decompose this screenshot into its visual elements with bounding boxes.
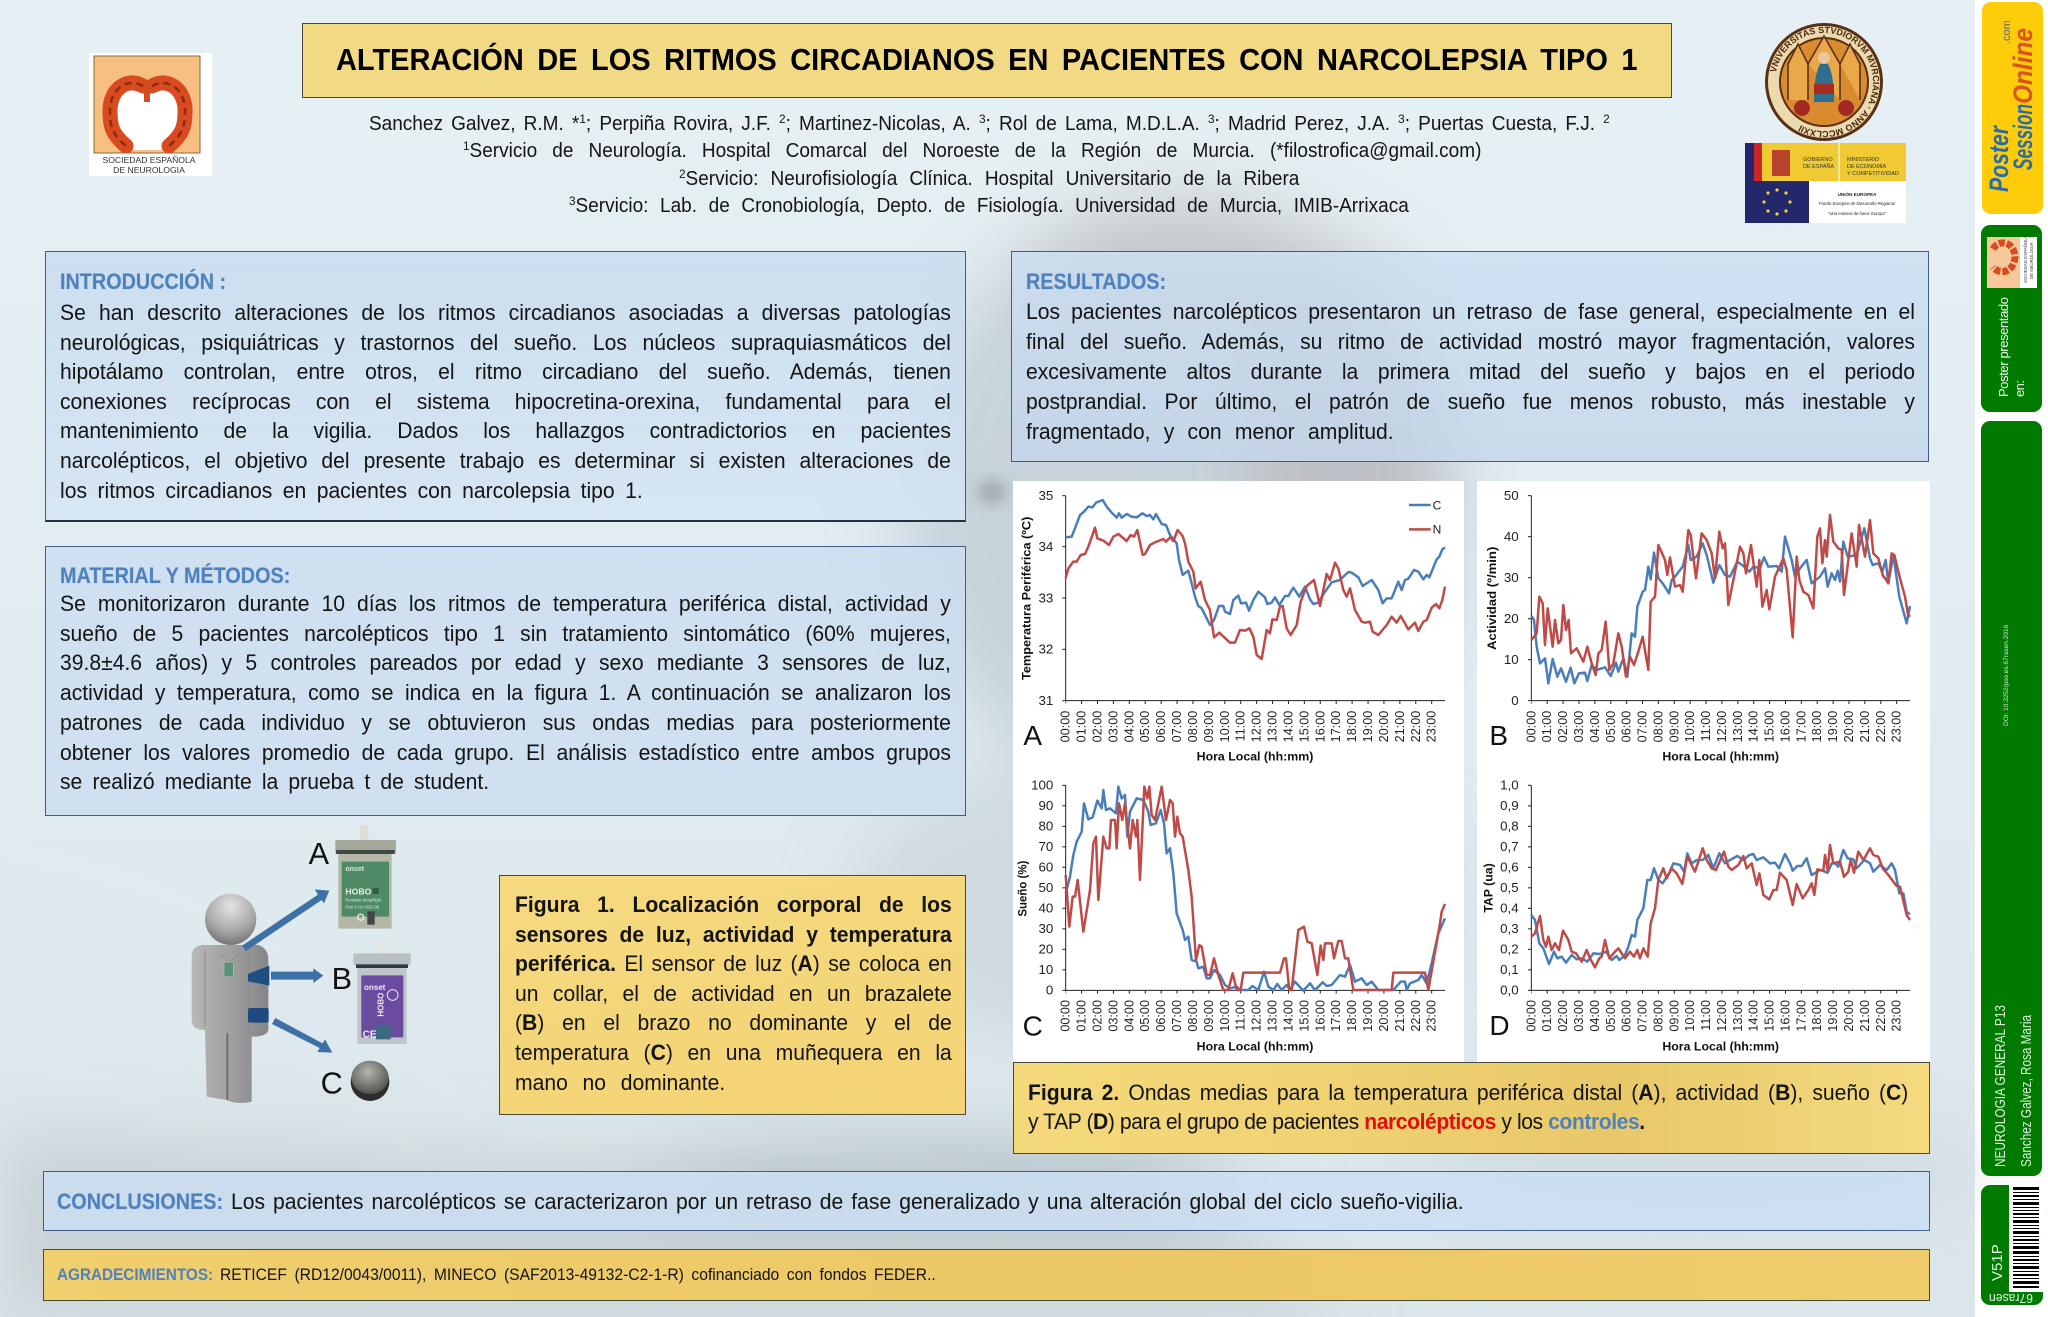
chart A: temperatura periférica: 15:00 bbox=[1297, 711, 1311, 742]
chart D: TAP: TAP (ua) bbox=[1482, 863, 1496, 913]
heading: conclusiones: CONCLUSIONES: bbox=[57, 1189, 223, 1214]
chart D: TAP: 09:00 bbox=[1667, 1000, 1681, 1032]
chart B: actividad: B bbox=[1489, 720, 1508, 751]
text: material y métodos: patrones de cada individuo y se obtuvieron sus ondas medias para posteriormente bbox=[60, 710, 951, 735]
panel: introducción bbox=[45, 251, 966, 522]
chart D: TAP: 22:00 bbox=[1874, 1000, 1888, 1032]
chart B: actividad: 23:00 bbox=[1890, 711, 1904, 742]
chart C: sueño: C bbox=[1023, 1011, 1043, 1042]
chart C: sueño: Sueño (%) bbox=[1016, 861, 1030, 917]
panel: material y métodos bbox=[45, 546, 966, 816]
chart A: temperatura periférica bbox=[1020, 488, 1446, 764]
text: resultados: Los pacientes narcolépticos presentaron un retraso de fase general, especialmente en el bbox=[1026, 299, 1915, 324]
caption: figura 1 bbox=[499, 875, 966, 1115]
chart D: TAP: D bbox=[1489, 1010, 1510, 1041]
chart A: temperatura periférica: 31 bbox=[1039, 693, 1053, 708]
chart A: temperatura periférica: Hora Local (hh:mm) bbox=[1197, 750, 1313, 764]
chart C: sueño bbox=[1016, 778, 1446, 1054]
icon: sensor B bbox=[353, 942, 411, 1044]
text: introducción: los ritmos circadianos en pacientes con narcolepsia tipo 1. bbox=[60, 478, 643, 503]
chart B: actividad: 40 bbox=[1504, 529, 1519, 544]
chart B: actividad: 09:00 bbox=[1667, 711, 1681, 742]
chart C: sueño: 05:00 bbox=[1138, 1000, 1152, 1032]
chart C: sueño: 15:00 bbox=[1297, 1000, 1311, 1032]
chart D: TAP: 0,6 bbox=[1500, 860, 1519, 875]
authors and affiliations: Sanchez Galvez, R.M. *1; Perpiña Rovira, J.F. 2; Martinez-Nicolas, A. 3; Rol de Lama, M.D.L.A. 3; Madrid Perez, J.A. 3; Puertas Cuesta, F.J. 2 bbox=[369, 112, 1610, 135]
chart A: temperatura periférica: A bbox=[1023, 720, 1042, 751]
chart B: actividad: 14:00 bbox=[1747, 711, 1761, 742]
icon: person bbox=[192, 894, 269, 1103]
chart C: sueño: 07:00 bbox=[1170, 1000, 1184, 1032]
chart A: temperatura periférica: 32 bbox=[1039, 642, 1053, 657]
chart A: temperatura periférica: 20:00 bbox=[1377, 711, 1391, 742]
chart A: temperatura periférica: 11:00 bbox=[1234, 711, 1248, 741]
chart A: temperatura periférica: 13:00 bbox=[1266, 711, 1280, 742]
text: conclusiones: Los pacientes narcolépticos se caracterizaron por un retraso de fase generalizado y una alteración global del ciclo sueño-vigilia. bbox=[231, 1189, 1464, 1214]
sidebar: barcode tag: V51P bbox=[1989, 1244, 2006, 1281]
text: material y métodos: Se monitorizaron durante 10 días los ritmos de temperatura periférica distal, actividad y bbox=[60, 591, 951, 616]
chart C: sueño: 40 bbox=[1039, 901, 1053, 916]
chart D: TAP: 01:00 bbox=[1540, 1000, 1554, 1032]
chart C: sueño: 01:00 bbox=[1075, 1000, 1089, 1032]
chart D: TAP: 0,1 bbox=[1500, 962, 1519, 977]
sidebar: session info: DOI: 10.3252/pso.es.67rasen.2016 bbox=[2003, 624, 2010, 726]
chart B: actividad: 10:00 bbox=[1683, 711, 1697, 742]
chart C: sueño: 16:00 bbox=[1313, 1000, 1327, 1032]
text: material y métodos: actividad y temperatura, como se indica en la figura 1. A continuación se analizaron los bbox=[60, 680, 951, 705]
chart C: sueño: 22:00 bbox=[1409, 1000, 1423, 1032]
figure 1: person with sensors bbox=[192, 825, 411, 1103]
chart B: actividad: 18:00 bbox=[1810, 711, 1824, 742]
sidebar: barcode tag bbox=[1981, 1185, 2043, 1305]
chart D: TAP: 20:00 bbox=[1842, 1000, 1856, 1032]
text: resultados bbox=[1026, 299, 1915, 444]
sidebar: poster presentado en: Poster presentado bbox=[1996, 297, 2011, 397]
caption: figura 1: periférica. El sensor de luz (A) se coloca en bbox=[515, 951, 952, 976]
chart C: sueño: 80 bbox=[1039, 819, 1053, 834]
chart C: sueño: 23:00 bbox=[1425, 1000, 1439, 1032]
chart B: actividad: 20:00 bbox=[1842, 711, 1856, 742]
heading: resultados: RESULTADOS: bbox=[1026, 269, 1166, 294]
logo: Ministerio de Economía y FEDER bbox=[1745, 143, 1906, 223]
chart D: TAP: 10:00 bbox=[1683, 1000, 1697, 1032]
arrow: to sensor A bbox=[242, 889, 329, 951]
chart A: temperatura periférica: 17:00 bbox=[1329, 711, 1343, 742]
chart D: TAP: 19:00 bbox=[1826, 1000, 1840, 1032]
chart C: sueño: 21:00 bbox=[1393, 1000, 1407, 1032]
chart C: sueño: 50 bbox=[1039, 880, 1053, 895]
chart D: TAP: 14:00 bbox=[1747, 1000, 1761, 1032]
chart C: sueño: 08:00 bbox=[1186, 1000, 1200, 1032]
icon: sensor B: HOBO bbox=[376, 993, 385, 1017]
logo: Universidad de Murcia seal: VNIVERSITAS STVDIORVM MVRCIANA · ANNO MCCLXXII bbox=[1770, 26, 1880, 138]
text: material y métodos: se realizó mediante la prueba t de student. bbox=[60, 769, 489, 794]
panel: conclusiones bbox=[43, 1171, 1930, 1231]
sidebar: PosterSessionOnline badge: Poster bbox=[1984, 125, 2014, 192]
chart D: TAP: 02:00 bbox=[1556, 1000, 1570, 1032]
sidebar: poster presentado en: en: bbox=[2012, 380, 2027, 397]
chart D: TAP: 03:00 bbox=[1572, 1000, 1586, 1032]
title: ALTERACIÓN DE LOS RITMOS CIRCADIANOS EN PACIENTES CON NARCOLEPSIA TIPO 1 bbox=[336, 43, 1638, 77]
chart A: temperatura periférica: 23:00 bbox=[1425, 711, 1439, 742]
chart B: actividad: 05:00 bbox=[1604, 711, 1618, 742]
chart C: sueño: Hora Local (hh:mm) bbox=[1197, 1040, 1313, 1054]
chart A: temperatura periférica: C bbox=[1433, 498, 1442, 512]
chart C: sueño: 60 bbox=[1039, 860, 1053, 875]
chart B: actividad: 21:00 bbox=[1858, 711, 1872, 742]
chart C: sueño: 12:00 bbox=[1250, 1000, 1264, 1032]
chart D: TAP: 08:00 bbox=[1651, 1000, 1665, 1032]
chart C: sueño: 09:00 bbox=[1202, 1000, 1216, 1032]
icon: sensor A: Pendant temp/light bbox=[345, 897, 382, 902]
authors and affiliations: 2Servicio: Neurofisiología Clínica. Hospital Universitario de la Ribera bbox=[679, 167, 1299, 190]
authors and affiliations: 3Servicio: Lab. de Cronobiología, Depto. de Fisiología. Universidad de Murcia, IMIB-Arrixaca bbox=[569, 194, 1409, 217]
authors and affiliations bbox=[369, 112, 1610, 217]
chart D: TAP: 23:00 bbox=[1890, 1000, 1904, 1032]
chart D: TAP: 04:00 bbox=[1588, 1000, 1602, 1032]
label: C: C bbox=[321, 1066, 343, 1100]
text: resultados: final del sueño. Además, su ritmo de actividad mostró mayor fragmentación, valores bbox=[1026, 329, 1915, 354]
chart A: temperatura periférica: 06:00 bbox=[1154, 711, 1168, 742]
chart B: actividad: Hora Local (hh:mm) bbox=[1662, 750, 1779, 764]
chart D: TAP: 06:00 bbox=[1620, 1000, 1634, 1032]
heading: introducción: INTRODUCCIÓN : bbox=[60, 269, 226, 294]
chart C: sueño: 11:00 bbox=[1234, 1000, 1248, 1031]
text: introducción: hipotálamo controlan, entre otros, el ritmo circadiano del sueño. Además, tienen bbox=[60, 359, 951, 384]
caption: figura 2 bbox=[1013, 1062, 1930, 1154]
chart D: TAP: 21:00 bbox=[1858, 1000, 1872, 1032]
chart B: actividad: 01:00 bbox=[1540, 711, 1554, 742]
chart D: TAP: 11:00 bbox=[1699, 1000, 1713, 1031]
chart D: TAP: 0,9 bbox=[1500, 798, 1519, 813]
chart D: TAP: 0,5 bbox=[1500, 880, 1519, 895]
chart A: temperatura periférica: 34 bbox=[1039, 539, 1054, 554]
chart A: temperatura periférica: 19:00 bbox=[1361, 711, 1375, 742]
chart A: temperatura periférica: 01:00 bbox=[1075, 711, 1089, 742]
chart C: sueño: 18:00 bbox=[1345, 1000, 1359, 1032]
text: introducción: Se han descrito alteraciones de los ritmos circadianos asociadas a diversas patologías bbox=[60, 300, 951, 325]
chart D: TAP: 05:00 bbox=[1604, 1000, 1618, 1032]
chart C: sueño: 0 bbox=[1046, 983, 1053, 998]
chart C: sueño: 20 bbox=[1039, 942, 1053, 957]
chart B: actividad: 13:00 bbox=[1731, 711, 1745, 742]
icon: sensor A: onset bbox=[345, 866, 365, 873]
chart A: temperatura periférica: 12:00 bbox=[1250, 711, 1264, 742]
chart B: actividad: 17:00 bbox=[1794, 711, 1808, 742]
logo: Ministerio de Economía y FEDER: Fondo Europeo de Desarrollo Regional bbox=[1819, 201, 1896, 206]
sidebar: PosterSessionOnline badge bbox=[1982, 2, 2043, 214]
caption: figura 1: mano no dominante. bbox=[515, 1070, 725, 1095]
chart A: temperatura periférica: 04:00 bbox=[1122, 711, 1136, 742]
text: material y métodos bbox=[60, 591, 951, 794]
chart C: sueño: 14:00 bbox=[1281, 1000, 1295, 1032]
chart A: temperatura periférica: 33 bbox=[1039, 590, 1053, 605]
caption: figura 1: sensores de luz, actividad y temperatura bbox=[515, 922, 952, 947]
logo: Sociedad Española de Neurología: SOCIEDAD ESPAÑOLA bbox=[103, 155, 196, 165]
chart C: sueño: 10 bbox=[1039, 962, 1053, 977]
sidebar: PosterSessionOnline badge: Online bbox=[2008, 28, 2038, 104]
chart D: TAP: 16:00 bbox=[1778, 1000, 1792, 1032]
arrow: to sensor C bbox=[272, 1018, 332, 1053]
text: resultados: excesivamente altos durante la primera mitad del sueño y bajos en el periodo bbox=[1026, 359, 1915, 384]
chart D: TAP: 18:00 bbox=[1810, 1000, 1824, 1032]
chart B: actividad: 04:00 bbox=[1588, 711, 1602, 742]
chart C: sueño: 02:00 bbox=[1090, 1000, 1104, 1032]
sidebar: session info bbox=[1981, 421, 2042, 1176]
chart A: temperatura periférica: 18:00 bbox=[1345, 711, 1359, 742]
icon: sensor A: Part # UA-002-08 bbox=[345, 904, 380, 909]
text: material y métodos: 39.8±4.6 años) y 5 controles pareados por edad y sexo mediante 3 sensores de luz, bbox=[60, 650, 951, 675]
chart B: actividad: 30 bbox=[1504, 570, 1519, 585]
chart A: temperatura periférica: Temperatura Periférica (ºC) bbox=[1020, 517, 1034, 680]
caption: figura 1: un collar, el de actividad en un brazalete bbox=[515, 981, 952, 1006]
chart D: TAP bbox=[1482, 778, 1911, 1054]
chart A: temperatura periférica: 05:00 bbox=[1138, 711, 1152, 742]
chart B: actividad bbox=[1485, 488, 1912, 764]
chart D: TAP: Hora Local (hh:mm) bbox=[1662, 1040, 1779, 1054]
text: introducción: narcolépticos, el objetivo del presente trabajo es determinar si existen alteraciones de bbox=[60, 448, 951, 473]
text: agradecimientos: RETICEF (RD12/0043/0011), MINECO (SAF2013-49132-C2-1-R) cofinanciado con fondos FEDER.. bbox=[220, 1265, 936, 1284]
chart B: actividad: 20 bbox=[1504, 611, 1519, 626]
chart C: sueño: 00:00 bbox=[1059, 1000, 1073, 1032]
sidebar: session info: Sanchez Galvez, Rosa Maria bbox=[2019, 1014, 2035, 1167]
caption: figura 1: Figura 1. Localización corporal de los bbox=[515, 892, 952, 917]
sidebar: PosterSessionOnline badge: Session bbox=[2008, 104, 2038, 170]
text: introducción: mantenimiento de la vigilia. Dados los hallazgos contradictorios en pacientes bbox=[60, 418, 951, 443]
chart B: actividad: 19:00 bbox=[1826, 711, 1840, 742]
chart D: TAP: 15:00 bbox=[1763, 1000, 1777, 1032]
logo: Ministerio de Economía y FEDER: GOBIERNO bbox=[1803, 157, 1833, 163]
icon: sensor C button bbox=[351, 1061, 389, 1101]
panel: agradecimientos bbox=[43, 1249, 1930, 1301]
panel: chart backdrop left bbox=[1013, 481, 1464, 1063]
caption: figura 2: Figura 2. Ondas medias para la temperatura periférica distal (A), actividad (B), sueño (C) bbox=[1028, 1080, 1908, 1105]
chart C: sueño: 17:00 bbox=[1329, 1000, 1343, 1032]
chart D: TAP: 00:00 bbox=[1524, 1000, 1538, 1032]
chart A: temperatura periférica: 14:00 bbox=[1281, 711, 1295, 742]
chart C: sueño: 19:00 bbox=[1361, 1000, 1375, 1032]
sidebar: poster presentado en bbox=[1981, 225, 2042, 412]
chart C: sueño: 70 bbox=[1039, 839, 1053, 854]
logo: Ministerio de Economía y FEDER: MINISTERIO bbox=[1847, 157, 1880, 163]
chart D: TAP: 0,8 bbox=[1500, 819, 1519, 834]
heading: agradecimientos: AGRADECIMIENTOS: bbox=[57, 1265, 213, 1284]
authors and affiliations: 1Servicio de Neurología. Hospital Comarcal del Noroeste de la Región de Murcia. (*filostrofica@gmail.com) bbox=[463, 139, 1481, 162]
chart B: actividad: 06:00 bbox=[1620, 711, 1634, 742]
text: introducción: neurológicas, psiquiátricas y trastornos del sueño. Los núcleos supraquiasmáticos del bbox=[60, 330, 951, 355]
chart B: actividad: Actividad (º/min) bbox=[1485, 547, 1499, 650]
chart B: actividad: 00:00 bbox=[1524, 711, 1538, 742]
heading: material y métodos: MATERIAL Y MÉTODOS: bbox=[60, 563, 290, 588]
text: material y métodos: sueño de 5 pacientes narcolépticos tipo 1 sin tratamiento sintomático (60% mujeres, bbox=[60, 621, 951, 646]
chart A: temperatura periférica: 08:00 bbox=[1186, 711, 1200, 742]
chart A: temperatura periférica: N bbox=[1433, 523, 1441, 537]
logo: Ministerio de Economía y FEDER: Y COMPETITIVIDAD bbox=[1847, 171, 1899, 177]
chart A: temperatura periférica: 35 bbox=[1039, 488, 1053, 503]
chart B: actividad: 16:00 bbox=[1778, 711, 1792, 742]
arrow: to sensor B bbox=[271, 968, 323, 983]
label: B: B bbox=[332, 962, 352, 996]
sidebar: poster presentado en: SOCIEDAD ESPAÑOLA bbox=[2023, 235, 2028, 283]
chart A: temperatura periférica: 10:00 bbox=[1218, 711, 1232, 742]
chart B: actividad: 10 bbox=[1504, 652, 1519, 667]
panel: chart backdrop right bbox=[1477, 481, 1930, 1063]
chart C: sueño: 06:00 bbox=[1154, 1000, 1168, 1032]
caption: figura 1: temperatura (C) en una muñequera en la bbox=[515, 1040, 952, 1065]
chart A: temperatura periférica: 21:00 bbox=[1393, 711, 1407, 742]
chart B: actividad: 08:00 bbox=[1651, 711, 1665, 742]
chart B: actividad: 50 bbox=[1504, 488, 1519, 503]
icon: sensor B: onset bbox=[364, 983, 386, 992]
chart B: actividad: 03:00 bbox=[1572, 711, 1586, 742]
chart C: sueño: 10:00 bbox=[1218, 1000, 1232, 1032]
chart D: TAP: 0,0 bbox=[1500, 983, 1519, 998]
label: A: A bbox=[309, 837, 330, 871]
chart A: temperatura periférica: 07:00 bbox=[1170, 711, 1184, 742]
chart D: TAP: 07:00 bbox=[1636, 1000, 1650, 1032]
chart D: TAP: 0,3 bbox=[1500, 921, 1519, 936]
sidebar: PosterSessionOnline badge: .com bbox=[2001, 20, 2013, 44]
chart C: sueño: 04:00 bbox=[1122, 1000, 1136, 1032]
caption: figura 1: (B) en el brazo no dominante y el de bbox=[515, 1010, 952, 1035]
logo: Sociedad Española de Neurología bbox=[89, 53, 212, 176]
text: introducción: conexiones recíprocas con el sistema hipocretina-orexina, fundamental para el bbox=[60, 389, 951, 414]
chart D: TAP: 0,4 bbox=[1500, 901, 1519, 916]
text: material y métodos: obtener los valores promedio de cada grupo. El análisis estadístico entre ambos grupos bbox=[60, 740, 951, 765]
chart A: temperatura periférica: 00:00 bbox=[1059, 711, 1073, 742]
chart C: sueño: 100 bbox=[1031, 778, 1053, 793]
chart A: temperatura periférica: 16:00 bbox=[1313, 711, 1327, 742]
chart D: TAP: 0,2 bbox=[1500, 942, 1519, 957]
text: resultados: fragmentado, y con menor amplitud. bbox=[1026, 419, 1394, 444]
chart A: temperatura periférica: 03:00 bbox=[1106, 711, 1120, 742]
panel: resultados bbox=[1011, 251, 1929, 462]
chart B: actividad: 0 bbox=[1511, 693, 1519, 708]
icon: sensor B: CE bbox=[363, 1029, 377, 1040]
chart B: actividad: 22:00 bbox=[1874, 711, 1888, 742]
chart C: sueño: 20:00 bbox=[1377, 1000, 1391, 1032]
caption: figura 2: y TAP (D) para el grupo de pacientes narcolépticos y los controles. bbox=[1028, 1109, 1645, 1134]
icon: sensor A: HOBO bbox=[345, 887, 372, 897]
text: resultados: postprandial. Por último, el patrón de sueño fue menos robusto, más inestable y bbox=[1026, 389, 1915, 414]
sidebar: barcode tag: 67rasen bbox=[1989, 1291, 2033, 1306]
chart A: temperatura periférica: 02:00 bbox=[1090, 711, 1104, 742]
chart B: actividad: 15:00 bbox=[1763, 711, 1777, 742]
logo: Ministerio de Economía y FEDER: UNIÓN EUROPEA bbox=[1838, 190, 1877, 197]
chart C: sueño: 13:00 bbox=[1266, 1000, 1280, 1032]
chart B: actividad: 11:00 bbox=[1699, 711, 1713, 741]
chart B: actividad: 07:00 bbox=[1636, 711, 1650, 742]
chart D: TAP: 0,7 bbox=[1500, 839, 1519, 854]
chart D: TAP: 13:00 bbox=[1731, 1000, 1745, 1032]
chart D: TAP: 17:00 bbox=[1794, 1000, 1808, 1032]
chart A: temperatura periférica: 22:00 bbox=[1409, 711, 1423, 742]
chart D: TAP: 1,0 bbox=[1500, 778, 1519, 793]
sidebar: session info: NEUROLOGIA GENERAL P13 bbox=[1993, 1005, 2009, 1167]
chart C: sueño: 90 bbox=[1039, 798, 1053, 813]
chart C: sueño: 30 bbox=[1039, 921, 1053, 936]
logo: Ministerio de Economía y FEDER: DE ECONOMÍA bbox=[1847, 163, 1886, 170]
logo: Ministerio de Economía y FEDER: "Una manera de hacer Europa" bbox=[1828, 211, 1887, 216]
sidebar: poster presentado en: DE NEUROLOGIA bbox=[2029, 242, 2034, 279]
text: introducción bbox=[60, 300, 951, 503]
chart C: sueño: 03:00 bbox=[1106, 1000, 1120, 1032]
title bbox=[302, 23, 1672, 98]
chart B: actividad: 12:00 bbox=[1715, 711, 1729, 742]
logo: Ministerio de Economía y FEDER: DE ESPAÑA bbox=[1803, 163, 1834, 170]
chart D: TAP: 12:00 bbox=[1715, 1000, 1729, 1032]
chart A: temperatura periférica: 09:00 bbox=[1202, 711, 1216, 742]
chart B: actividad: 02:00 bbox=[1556, 711, 1570, 742]
logo: Sociedad Española de Neurología: DE NEUROLOGIA bbox=[113, 165, 185, 175]
icon: sensor A bbox=[335, 825, 396, 929]
